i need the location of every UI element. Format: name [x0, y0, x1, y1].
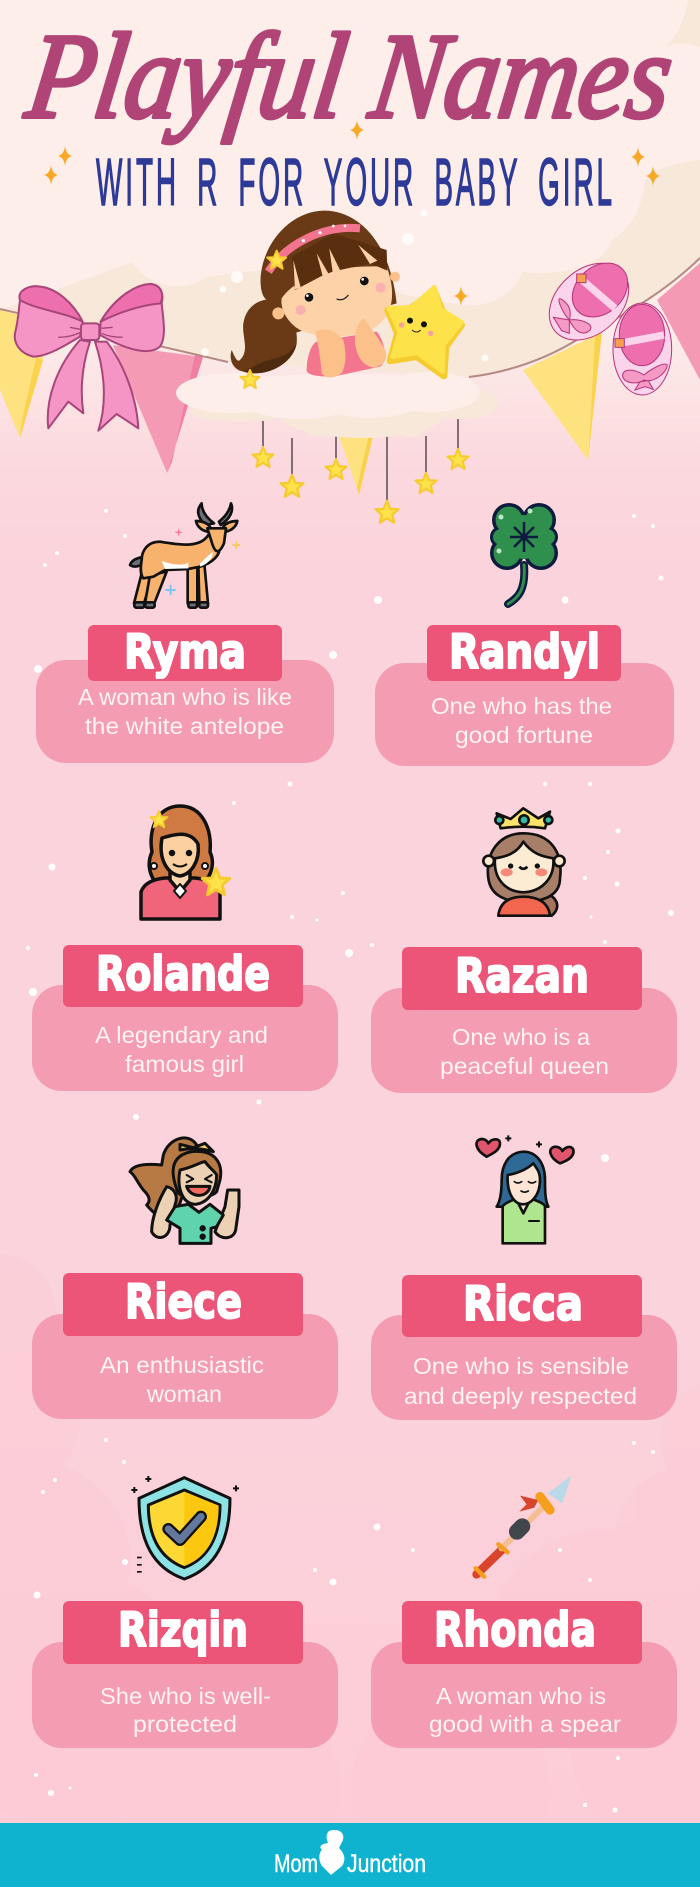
- panel: Rolande description: famous girl: [125, 1051, 244, 1077]
- icon: clover: [490, 503, 558, 604]
- panel: Rhonda description: [371, 1642, 677, 1748]
- icon: baby shoes: [534, 248, 672, 395]
- cream cloud layer: [0, 0, 700, 377]
- card: Rhonda: [371, 1476, 677, 1748]
- name tag: Ricca: [402, 1275, 642, 1337]
- footer bar: [0, 1823, 700, 1887]
- icon: queen: [483, 808, 565, 916]
- logo: MomJunction: Mom: [274, 1850, 318, 1878]
- panel: Ricca description: and deeply respected: [404, 1383, 637, 1409]
- panel: Riece description: [32, 1314, 338, 1419]
- card: Rizqin: [32, 1476, 338, 1748]
- name tag: Rhonda: Rhonda: [434, 1603, 596, 1658]
- name tag: Randyl: Randyl: [449, 625, 600, 680]
- hanging stars: [253, 447, 468, 523]
- icon: antelope: [130, 503, 240, 608]
- name tag: Ryma: Ryma: [124, 625, 246, 680]
- panel: Ryma description: the white antelope: [85, 713, 284, 739]
- panel: Rolande description: [32, 985, 338, 1091]
- panel: Riece description: An enthusiastic: [100, 1352, 264, 1378]
- bunting flags: [0, 263, 700, 495]
- card: Razan: [371, 808, 677, 1093]
- icon: pink bow: [15, 284, 164, 431]
- panel: Rhonda description: A woman who is: [436, 1683, 606, 1709]
- panel: Rizqin description: protected: [133, 1711, 237, 1737]
- icon: woman with hearts: [476, 1135, 574, 1243]
- panel: Razan description: peaceful queen: [440, 1053, 609, 1079]
- bunting string: [0, 258, 700, 377]
- panel: Ryma description: A woman who is like: [78, 684, 292, 710]
- panel: Razan description: [371, 988, 677, 1093]
- name tag: Ricca: Ricca: [463, 1277, 583, 1332]
- panel: Ricca description: One who is sensible: [413, 1353, 629, 1379]
- icon: cloud: [176, 372, 498, 438]
- name tag: Rizqin: [63, 1601, 303, 1664]
- icon: woman with star: [141, 806, 230, 919]
- panel: Rizqin description: [32, 1642, 338, 1748]
- name tag: Riece: Riece: [125, 1275, 242, 1330]
- name tag: Razan: [402, 947, 642, 1010]
- card: Randyl: [375, 503, 674, 766]
- icon: shield: [131, 1476, 239, 1579]
- panel: Randyl description: [375, 663, 674, 766]
- logo: MomJunction: Junction: [347, 1850, 426, 1878]
- panel: Rizqin description: She who is well-: [100, 1683, 271, 1709]
- panel: Rolande description: A legendary and: [95, 1022, 268, 1048]
- panel: Rhonda description: good with a spear: [429, 1711, 621, 1737]
- card: Ryma: [36, 503, 334, 763]
- panel: Riece description: woman: [146, 1381, 222, 1407]
- icon: spear: [476, 1476, 572, 1577]
- card: Riece: [32, 1138, 338, 1419]
- panel: Razan description: One who is a: [452, 1024, 590, 1050]
- front pale cloud: [0, 0, 700, 310]
- card: Rolande: [32, 806, 338, 1091]
- icon: girl with star: [231, 211, 462, 388]
- icon: enthusiastic woman: [130, 1138, 239, 1243]
- name tag: Rizqin: Rizqin: [118, 1603, 248, 1658]
- name tag: Riece: [63, 1273, 303, 1336]
- panel: Randyl description: good fortune: [455, 722, 593, 748]
- name tag: Rolande: Rolande: [96, 947, 270, 1002]
- panel: Ricca description: [371, 1315, 677, 1420]
- card: Ricca: [371, 1135, 677, 1420]
- name tag: Razan: Razan: [455, 949, 589, 1004]
- panel: Ryma description: [36, 660, 334, 763]
- sparkles: [44, 120, 660, 362]
- hanging star strings: [263, 419, 458, 510]
- logo: MomJunction: [274, 1830, 426, 1878]
- panel: Randyl description: One who has the: [431, 693, 612, 719]
